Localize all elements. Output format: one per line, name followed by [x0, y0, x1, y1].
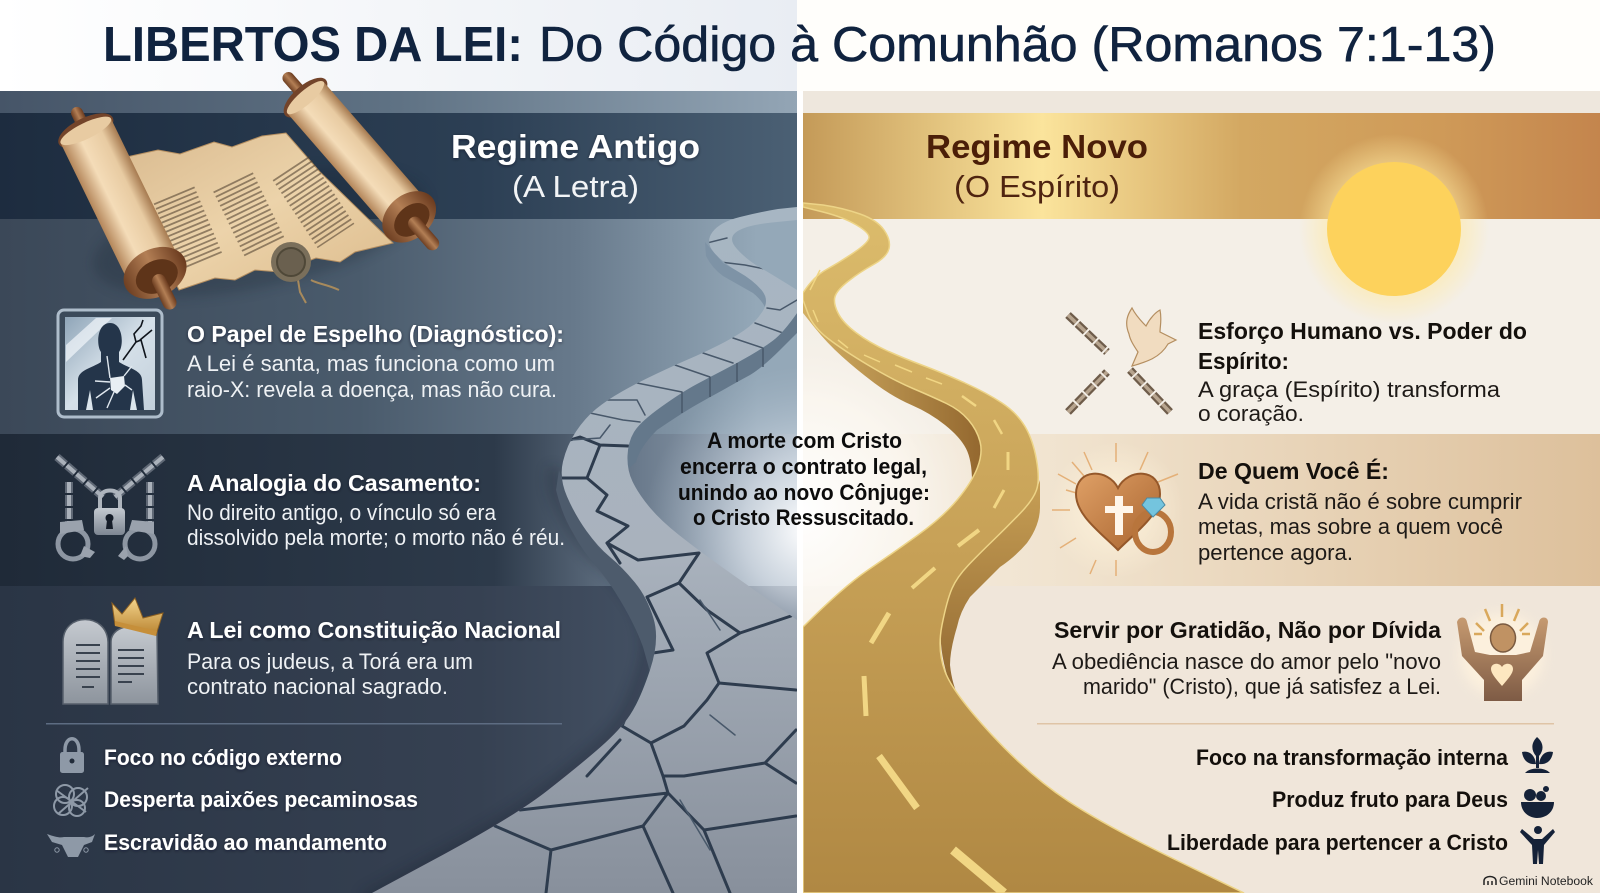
text block: O Papel de Espelho: [187, 321, 564, 402]
icon: heart, cross and ring: [1048, 442, 1184, 578]
list: new regime: Liberdade para pertencer a Cristo: [1167, 830, 1508, 855]
list: new regime: Foco na transformação interna: [1196, 745, 1509, 770]
parchment: [122, 133, 393, 290]
text block: A Analogia do Casamento: A Analogia do Casamento:: [187, 470, 481, 496]
list: old regime: Escravidão ao mandamento: [104, 830, 387, 855]
center callout: A morte com Cristo: [707, 428, 902, 453]
panel: Regime Antigo: [0, 54, 800, 893]
list: new regime: Produz fruto para Deus: [1272, 787, 1508, 812]
header background: [0, 0, 1600, 91]
text block: A Lei como Constituição Nacional: contrato nacional sagrado.: [187, 674, 448, 699]
list: old regime: [104, 745, 418, 855]
icon: ox yoke: [47, 834, 95, 857]
text block: O Papel de Espelho: raio-X: revela a doença, mas não cura.: [187, 377, 557, 402]
text block: De Quem Você É: A vida cristã não é sobre cumprir: [1198, 489, 1522, 514]
center callout: [678, 428, 930, 530]
text block: A Analogia do Casamento: No direito antigo, o vínculo só era: [187, 500, 497, 525]
text block: A Lei como Constituição Nacional: [187, 617, 561, 699]
heading: Regime Antigo: [451, 128, 700, 204]
text block: De Quem Você É: De Quem Você É:: [1198, 457, 1389, 484]
list: new regime: [1167, 745, 1509, 855]
icon: stone tablets with crown: [63, 598, 163, 704]
text block: Servir por Gratidão: marido" (Cristo), que já satisfez a Lei.: [1083, 674, 1441, 699]
text block: Esforço Humano: Esforço Humano vs. Poder do: [1198, 318, 1527, 344]
icon: person with raised arms: [1457, 604, 1548, 701]
icon: chains and handcuffs: [57, 457, 163, 560]
text block: Esforço Humano: Espírito:: [1198, 348, 1289, 374]
text block: De Quem Você É: pertence agora.: [1198, 540, 1353, 565]
watermark: Gemini Notebook: Gemini Notebook: [1499, 876, 1593, 888]
heading: Regime Novo: Regime Novo: [926, 128, 1148, 165]
left roller: [45, 93, 202, 323]
icon: standing person: [1520, 826, 1555, 864]
text block: De Quem Você É: [1198, 457, 1522, 565]
center callout: unindo ao novo Cônjuge:: [678, 480, 930, 505]
icon: broken chains and dove: [1068, 308, 1176, 412]
title: LIBERTOS DA LEI:: [103, 18, 523, 72]
text block: Esforço Humano: A graça (Espírito) transforma: [1198, 377, 1501, 402]
text block: Esforço Humano: [1198, 318, 1527, 426]
icon: cracked mirror: [58, 310, 162, 417]
panel: Regime Novo: [803, 91, 1600, 893]
heading: Regime Antigo: (A Letra): [512, 169, 639, 204]
icon: fruit basket: [1521, 786, 1554, 818]
stone road: [364, 207, 797, 893]
list: old regime: Foco no código externo: [104, 745, 342, 770]
heading: Regime Novo: (O Espírito): [954, 169, 1120, 204]
text block: O Papel de Espelho: A Lei é santa, mas funciona como um: [187, 351, 555, 376]
title: Do Código à Comunhão (Romanos 7:1-13): [539, 18, 1496, 72]
title: [103, 18, 1496, 72]
center callout: o Cristo Ressuscitado.: [693, 505, 914, 530]
scroll text lines: [174, 168, 336, 262]
center divider: [797, 91, 803, 893]
scroll: [45, 54, 459, 323]
heading: Regime Antigo: Regime Antigo: [451, 128, 700, 165]
golden road: [803, 203, 1244, 893]
text block: Servir por Gratidão: Servir por Gratidão, Não por Dívida: [1054, 617, 1441, 643]
text block: Servir por Gratidão: [1052, 617, 1441, 699]
list: old regime: Desperta paixões pecaminosas: [104, 787, 418, 812]
text block: A Analogia do Casamento: [187, 470, 565, 550]
text block: A Lei como Constituição Nacional: A Lei como Constituição Nacional: [187, 617, 561, 643]
sun: [1306, 140, 1483, 318]
text block: De Quem Você É: metas, mas sobre a quem você: [1198, 514, 1503, 539]
text block: Servir por Gratidão: A obediência nasce do amor pelo "novo: [1052, 649, 1441, 674]
center callout: encerra o contrato legal,: [680, 454, 927, 479]
icon: tangled knot: [54, 785, 88, 816]
icon: padlock: [60, 739, 84, 773]
text block: O Papel de Espelho: O Papel de Espelho (Diagnóstico):: [187, 321, 564, 347]
icon: sprout: [1522, 737, 1553, 773]
text block: A Analogia do Casamento: dissolvido pela morte; o morto não é réu.: [187, 525, 565, 550]
right roller: [262, 54, 459, 268]
wax seal: [271, 242, 339, 303]
text block: Esforço Humano: o coração.: [1198, 401, 1304, 426]
text block: A Lei como Constituição Nacional: Para os judeus, a Torá era um: [187, 649, 473, 674]
heading: Regime Novo: [926, 128, 1148, 204]
